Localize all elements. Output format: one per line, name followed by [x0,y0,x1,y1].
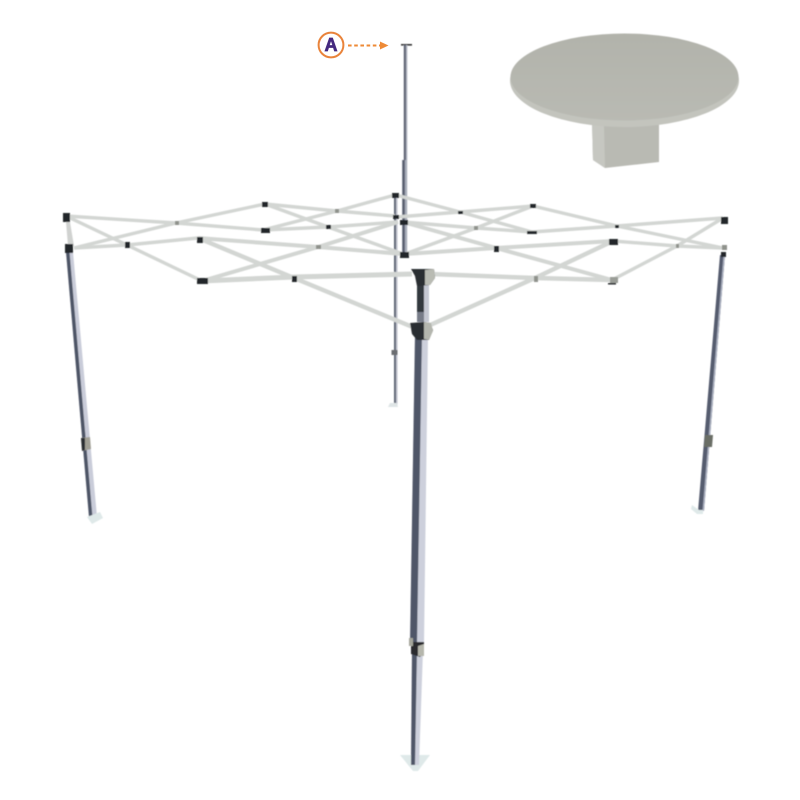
cap stem shade [592,122,605,168]
frame artwork [63,44,728,771]
cap rim [510,34,739,127]
strut joints and brackets [63,193,728,284]
cap top surface [510,34,738,120]
cap stem [592,122,659,168]
detail: pole cap [510,34,739,168]
callout marker A [319,33,343,57]
right leg [691,255,725,514]
front leg [400,285,430,771]
callout marker A: A [324,35,338,55]
front corner brackets [410,269,435,340]
back leg [388,197,398,407]
arrow to pole top [348,42,388,50]
central pole [401,44,412,255]
roof scissor struts [66,195,723,328]
left leg [66,222,103,524]
